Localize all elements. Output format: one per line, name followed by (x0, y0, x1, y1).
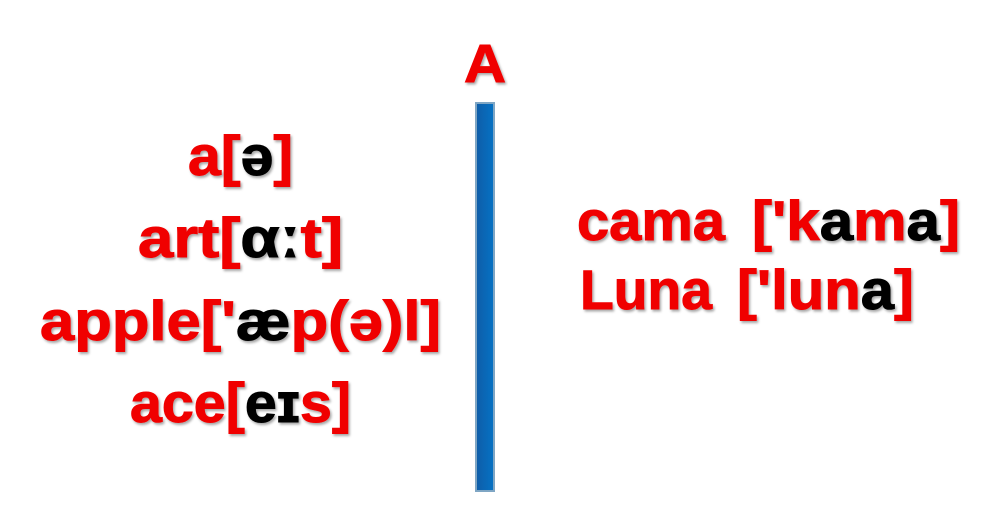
word: Luna: Luna (580, 258, 713, 321)
heading: letter A: A (464, 34, 506, 94)
transcription: cama: ['kama] (752, 189, 960, 252)
word: apple: apple[' æp(ə)l] (40, 289, 441, 352)
word: art: art[αːt] (138, 206, 343, 269)
word: ace: ace[eɪs] (130, 371, 351, 434)
transcription: Luna: ['luna] (737, 258, 914, 321)
left column: English examples (40, 124, 441, 434)
word: a: a[ə] (188, 124, 293, 187)
word: cama: cama (577, 189, 726, 252)
right column: Spanish examples (577, 189, 960, 321)
vertical divider bar (476, 103, 494, 491)
